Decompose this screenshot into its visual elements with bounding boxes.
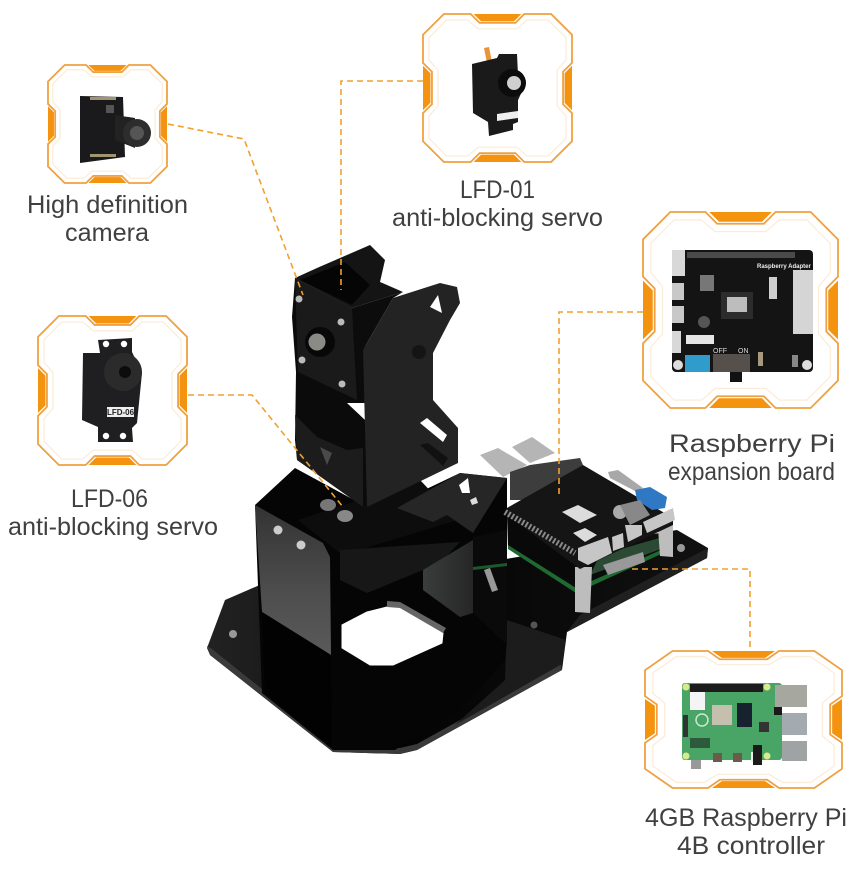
leader line: LFD-01 servo	[341, 81, 423, 290]
frame	[643, 212, 838, 408]
label: 4GB Raspberry Pi	[645, 804, 847, 832]
label	[392, 176, 603, 232]
callout: camera	[27, 65, 188, 247]
camera module image	[80, 96, 151, 163]
callout: LFD-01 servo	[392, 14, 603, 232]
frame	[645, 651, 842, 788]
label: LFD-06	[71, 485, 148, 513]
label: Raspberry Pi	[669, 430, 835, 458]
servo image	[82, 338, 142, 442]
frame	[423, 14, 572, 162]
callout: Raspberry Pi 4B	[645, 651, 847, 860]
servo image: LFD-06	[107, 408, 135, 417]
label: High definition	[27, 191, 188, 219]
leader line: expansion board	[559, 312, 643, 495]
label: camera	[65, 219, 149, 247]
robot pan-tilt assembly	[207, 245, 708, 754]
label: anti-blocking servo	[8, 513, 218, 541]
label	[8, 485, 218, 541]
label	[27, 191, 188, 247]
leader line: Raspberry Pi controller	[632, 569, 750, 650]
frame	[38, 316, 187, 465]
camera plate	[295, 278, 357, 400]
label: 4B controller	[677, 832, 825, 860]
callout: expansion board	[643, 212, 838, 486]
label: LFD-01	[460, 176, 535, 204]
servo image	[472, 47, 526, 136]
label: anti-blocking servo	[392, 204, 603, 232]
frame	[48, 65, 167, 183]
expansion board image	[672, 250, 813, 382]
label: expansion board	[668, 458, 835, 486]
upper bracket	[292, 245, 460, 507]
expansion board image: OFF	[713, 348, 727, 355]
square opening	[342, 607, 443, 665]
leader line: camera	[168, 124, 303, 295]
raspberry pi board stack	[480, 437, 675, 613]
base tower	[255, 468, 507, 750]
Raspberry Pi image	[682, 683, 807, 769]
base plate	[207, 530, 708, 754]
leader line: LFD-06 servo	[188, 395, 343, 507]
callout: LFD-06 servo	[8, 316, 218, 541]
label	[645, 804, 847, 860]
label	[668, 430, 835, 486]
expansion board image: Raspberry Adapter	[757, 264, 811, 270]
expansion board image: ON	[738, 348, 748, 355]
